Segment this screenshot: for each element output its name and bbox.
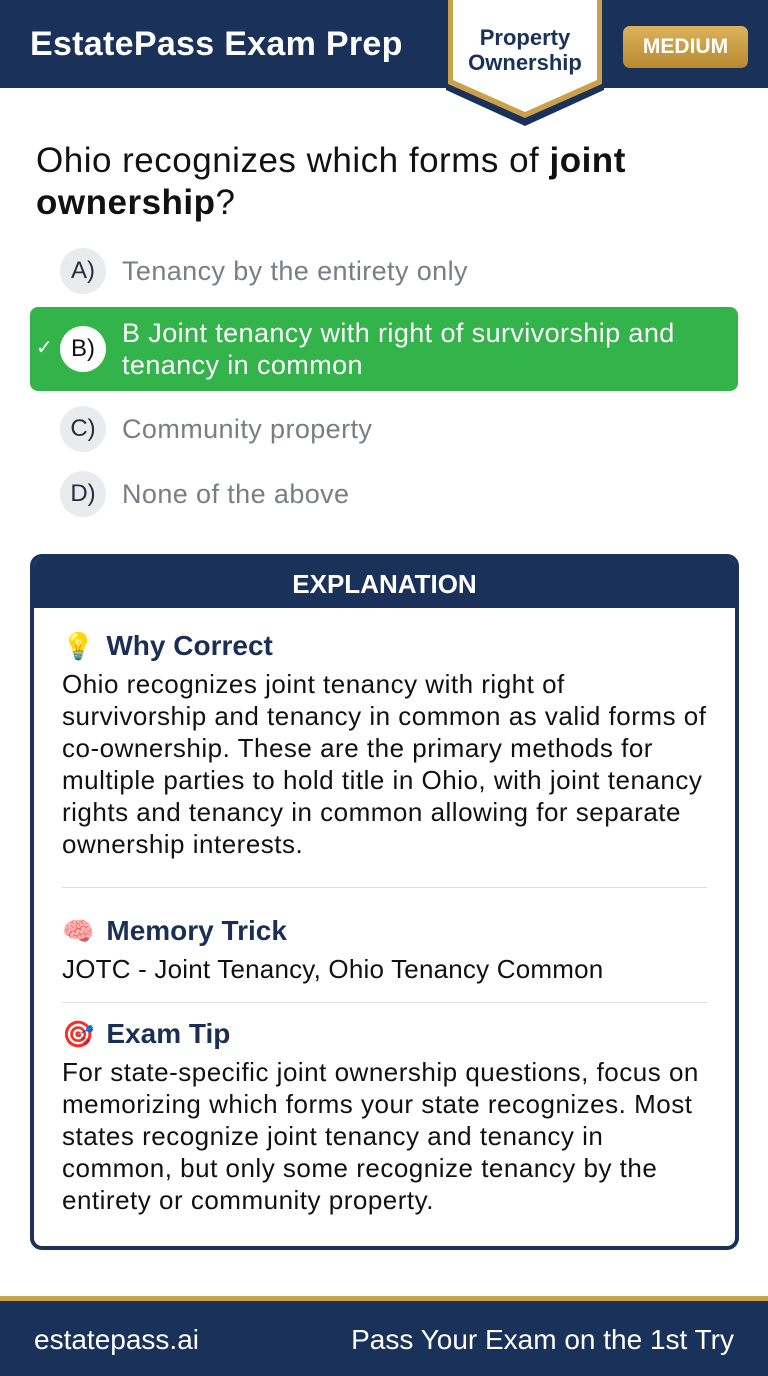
category badge bbox=[446, 0, 604, 126]
option A bbox=[60, 248, 468, 294]
memory trick: Memory Trick bbox=[106, 915, 287, 946]
why correct: 💡 bbox=[62, 630, 94, 660]
category badge: Ownership bbox=[468, 50, 582, 75]
option B correct bbox=[30, 307, 738, 391]
footer site: estatepass.ai bbox=[34, 1324, 199, 1355]
why correct: Ohio recognizes joint tenancy with right of survivorship and tenancy in common as valid forms of co-ownership. These are the primary methods for multiple parties to hold title in Ohio, with joint tenancy rights and tenancy in common allowing for separate ownership interests. bbox=[62, 669, 706, 859]
question: Ohio recognizes which forms of joint ownership? bbox=[36, 141, 626, 222]
option B correct: ✓ bbox=[36, 337, 53, 359]
difficulty badge bbox=[623, 26, 748, 68]
difficulty badge: MEDIUM bbox=[643, 35, 728, 58]
option D: None of the above bbox=[122, 478, 349, 508]
option C bbox=[60, 406, 372, 452]
title: EstatePass Exam Prep bbox=[30, 25, 403, 63]
option C: Community property bbox=[122, 414, 372, 444]
option D bbox=[60, 471, 349, 517]
option B correct: B Joint tenancy with right of survivorship and tenancy in common bbox=[122, 318, 675, 380]
option A: Tenancy by the entirety only bbox=[122, 256, 468, 286]
memory trick bbox=[62, 915, 603, 984]
category badge: Property bbox=[480, 25, 570, 50]
exam tip: For state-specific joint ownership questions, focus on memorizing which forms your state recognizes. Most states recognize joint tenancy and tenancy in common, but only some recognize tenancy by the entirety or community property. bbox=[62, 1057, 699, 1215]
option B correct: B) bbox=[71, 335, 95, 362]
option C: C) bbox=[70, 415, 96, 442]
option D: D) bbox=[70, 480, 96, 507]
exam tip: 🎯 bbox=[62, 1018, 94, 1048]
explanation header bbox=[34, 558, 735, 608]
memory trick: 🧠 bbox=[62, 916, 94, 946]
memory trick: JOTC - Joint Tenancy, Ohio Tenancy Common bbox=[62, 954, 603, 984]
why correct: Why Correct bbox=[106, 630, 273, 661]
exam tip: Exam Tip bbox=[106, 1018, 230, 1049]
explanation header: EXPLANATION bbox=[292, 569, 477, 599]
header bar bbox=[0, 0, 768, 88]
footer slogan: Pass Your Exam on the 1st Try bbox=[351, 1324, 734, 1355]
footer bbox=[0, 1296, 768, 1376]
option A: A) bbox=[71, 257, 95, 284]
explanation panel bbox=[30, 554, 739, 1250]
